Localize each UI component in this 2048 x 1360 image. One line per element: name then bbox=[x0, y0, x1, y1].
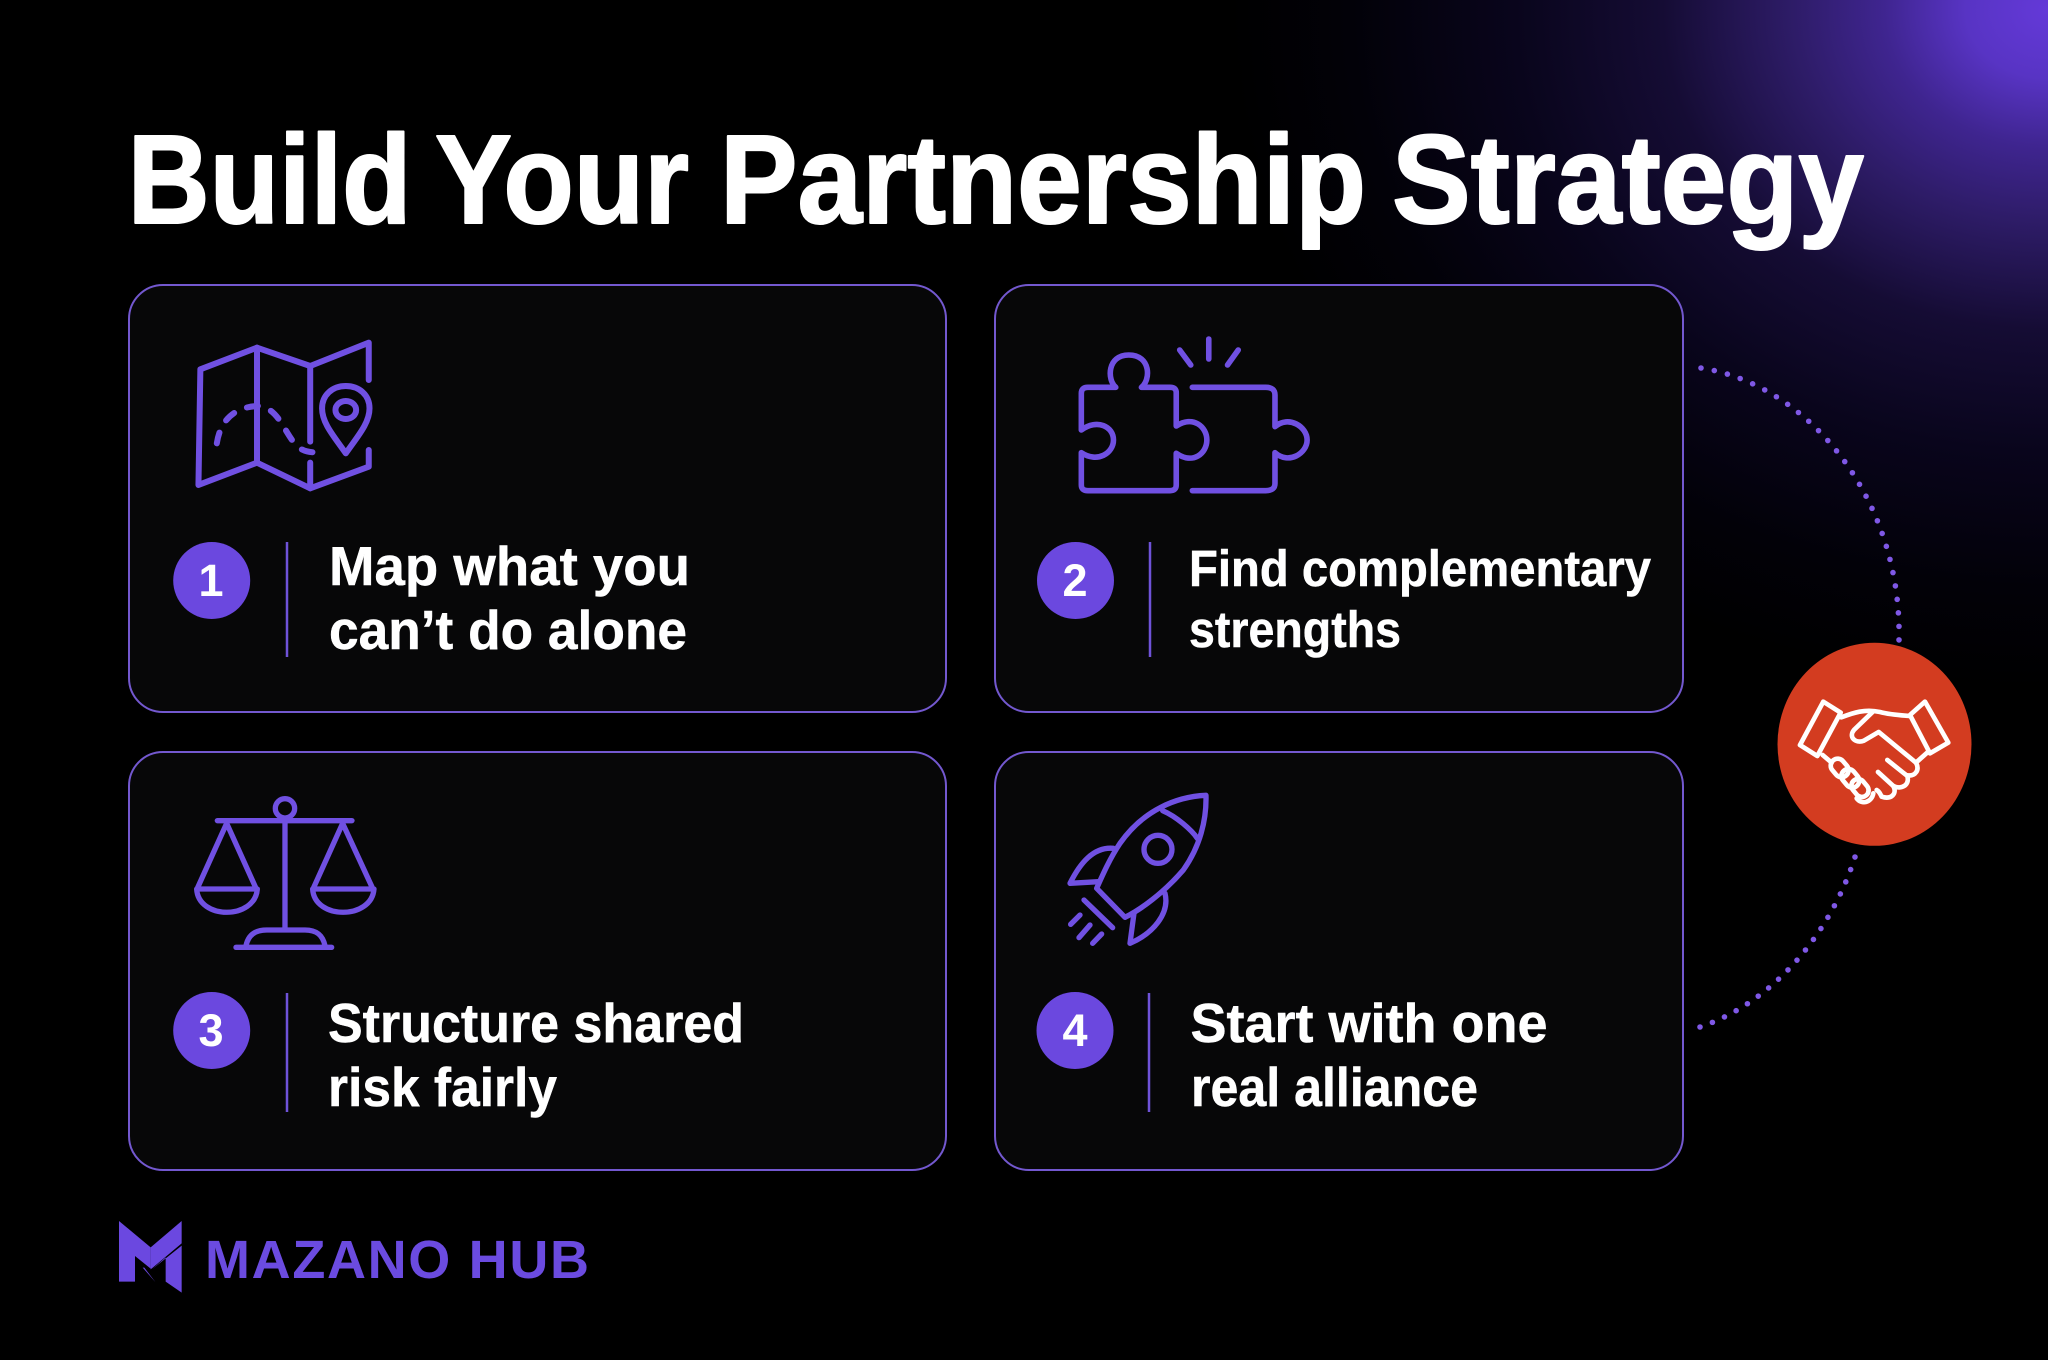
dotted connector: upper arc bbox=[1701, 368, 1899, 640]
handshake circle bbox=[1778, 643, 1972, 846]
step 4 text: real alliance bbox=[1191, 1056, 1478, 1118]
number badge 4: 4 bbox=[1062, 1005, 1088, 1056]
title: Your bbox=[435, 109, 689, 250]
title bbox=[128, 109, 1864, 250]
step 3 text bbox=[328, 992, 744, 1118]
number badge 1: 1 bbox=[198, 555, 224, 606]
icon: rocket bbox=[1070, 795, 1206, 943]
icon: balance scales bbox=[197, 799, 374, 947]
number badge 3 bbox=[173, 992, 250, 1069]
panel: step 1 map bbox=[129, 285, 946, 712]
number badge 4 bbox=[1036, 992, 1114, 1069]
step 2 text: strengths bbox=[1189, 601, 1401, 658]
step 4 text: Start with one bbox=[1190, 992, 1548, 1054]
icon: handshake bbox=[1800, 702, 1948, 802]
title: Partnership bbox=[720, 109, 1366, 250]
logo: Mazano Hub bbox=[119, 1221, 589, 1293]
step 1 text bbox=[329, 535, 690, 661]
logo mark bbox=[119, 1221, 182, 1293]
icon: folded map with pin bbox=[198, 343, 370, 488]
divider 1 bbox=[286, 542, 288, 657]
panel: step 2 puzzle bbox=[995, 285, 1683, 712]
step 3 text: risk fairly bbox=[328, 1056, 557, 1118]
title: Strategy bbox=[1392, 109, 1864, 250]
step 1 text: can’t do alone bbox=[329, 599, 687, 661]
title: Build bbox=[128, 109, 412, 250]
panel: step 4 rocket bbox=[995, 752, 1683, 1170]
number badge 2 bbox=[1037, 542, 1114, 619]
step 2 text bbox=[1189, 540, 1652, 658]
divider 4 bbox=[1148, 993, 1150, 1112]
step 1 text: Map what you bbox=[329, 535, 690, 597]
number badge 3: 3 bbox=[198, 1005, 224, 1056]
number badge 1 bbox=[173, 542, 250, 619]
divider 3 bbox=[286, 993, 288, 1112]
dotted connector: lower arc bbox=[1700, 857, 1855, 1027]
step 4 text bbox=[1190, 992, 1548, 1118]
divider 2 bbox=[1149, 542, 1151, 657]
step 3 text: Structure shared bbox=[328, 992, 744, 1054]
icon: puzzle pieces bbox=[1081, 339, 1307, 491]
panel: step 3 scales bbox=[129, 752, 946, 1170]
number badge 2: 2 bbox=[1062, 555, 1088, 606]
logo wordmark: MAZANO HUB bbox=[205, 1230, 589, 1290]
step 2 text: Find complementary bbox=[1189, 540, 1652, 597]
